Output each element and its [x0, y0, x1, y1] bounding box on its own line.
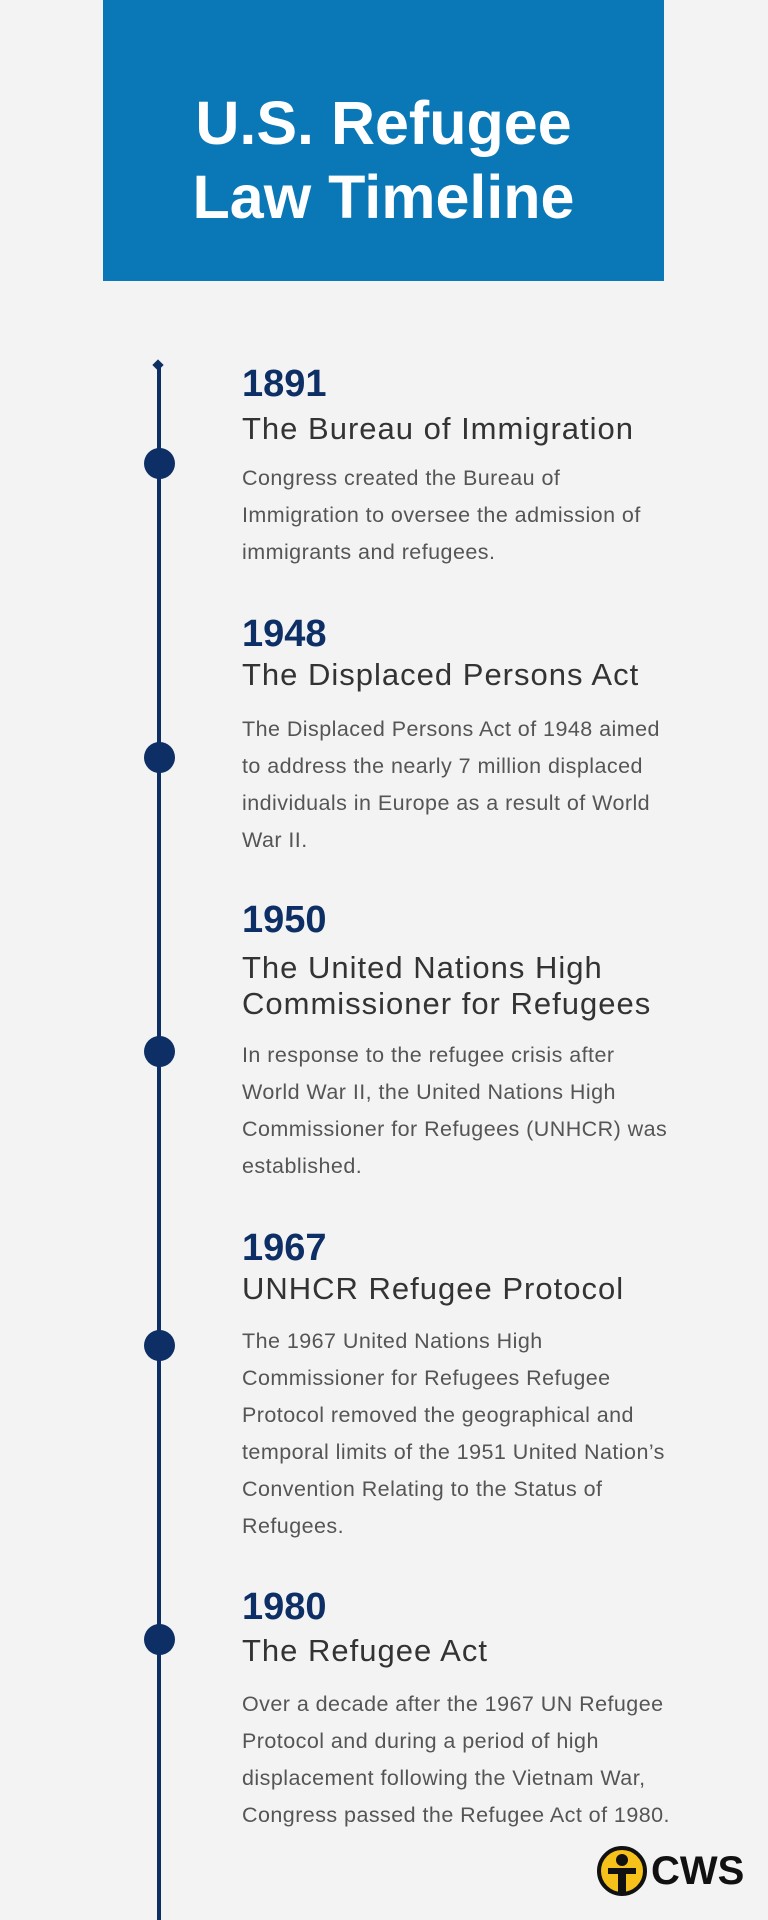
body: The Displaced Persons Act of 1948 aimed [242, 717, 660, 741]
body: individuals in Europe as a result of World [242, 791, 650, 815]
timeline top marker [152, 359, 164, 371]
body: Convention Relating to the Status of [242, 1477, 602, 1501]
body [242, 466, 641, 564]
timeline line [157, 364, 161, 1920]
dot 1891 [144, 448, 175, 479]
body: In response to the refugee crisis after [242, 1043, 614, 1067]
body: Refugees. [242, 1514, 344, 1538]
body: Congress passed the Refugee Act of 1980. [242, 1803, 670, 1827]
heading [242, 950, 651, 1021]
entry 1980 [242, 1586, 670, 1827]
heading: The United Nations High [242, 950, 603, 985]
body: Over a decade after the 1967 UN Refugee [242, 1692, 664, 1716]
title banner: U.S. Refugee [195, 89, 572, 157]
title banner: Law Timeline [193, 163, 574, 231]
body: World War II, the United Nations High [242, 1080, 616, 1104]
title banner [103, 0, 664, 281]
body: to address the nearly 7 million displaced [242, 754, 643, 778]
body: Commissioner for Refugees (UNHCR) was [242, 1117, 667, 1141]
body: War II. [242, 828, 308, 852]
logo text: CWS [651, 1849, 744, 1893]
entry 1950 [242, 899, 667, 1178]
body [242, 717, 660, 852]
entry 1967 [242, 1227, 665, 1538]
body: immigrants and refugees. [242, 540, 495, 564]
heading: The Displaced Persons Act [242, 657, 639, 692]
heading: The Bureau of Immigration [242, 411, 634, 446]
icon: CWS emblem [597, 1846, 647, 1896]
year: 1967 [242, 1227, 327, 1269]
year: 1980 [242, 1586, 327, 1628]
body: temporal limits of the 1951 United Nation’s [242, 1440, 665, 1464]
body: The 1967 United Nations High [242, 1329, 543, 1353]
body: Protocol removed the geographical and [242, 1403, 634, 1427]
body: Immigration to oversee the admission of [242, 503, 641, 527]
heading: UNHCR Refugee Protocol [242, 1271, 624, 1306]
body: established. [242, 1154, 362, 1178]
body: displacement following the Vietnam War, [242, 1766, 646, 1790]
body: Congress created the Bureau of [242, 466, 560, 490]
body [242, 1692, 670, 1827]
body [242, 1043, 667, 1178]
dot 1950 [144, 1036, 175, 1067]
year: 1948 [242, 613, 327, 655]
dot 1967 [144, 1330, 175, 1361]
CWS logo [597, 1846, 744, 1896]
body: Protocol and during a period of high [242, 1729, 599, 1753]
body [242, 1329, 665, 1538]
year: 1950 [242, 899, 327, 941]
heading: The Refugee Act [242, 1633, 488, 1668]
entry 1948 [242, 613, 660, 852]
entry 1891 [242, 363, 641, 564]
dot 1980 [144, 1624, 175, 1655]
year: 1891 [242, 363, 327, 405]
body: Commissioner for Refugees Refugee [242, 1366, 611, 1390]
heading: Commissioner for Refugees [242, 986, 651, 1021]
dot 1948 [144, 742, 175, 773]
